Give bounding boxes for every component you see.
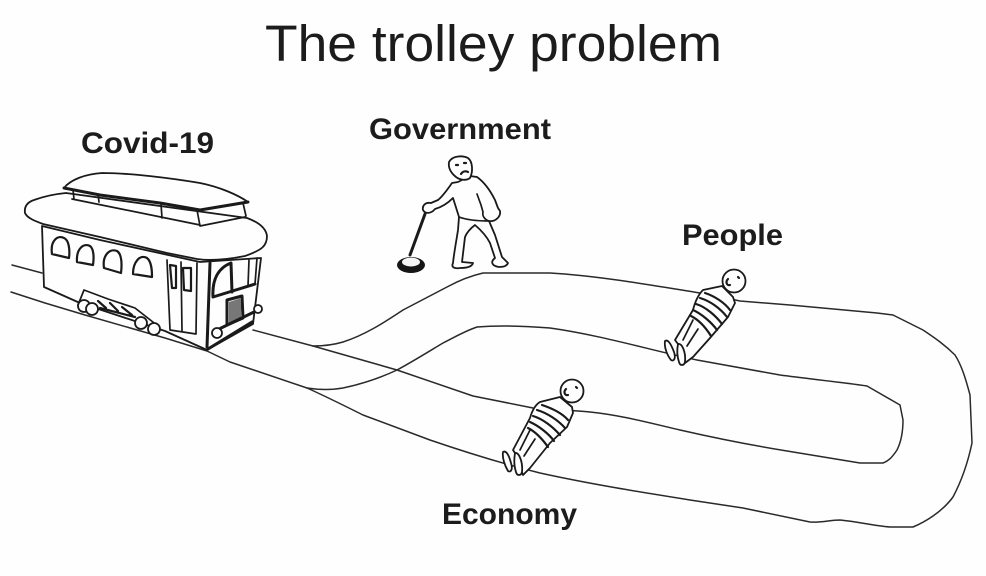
tram upper roof — [64, 173, 248, 210]
feet — [665, 341, 685, 365]
head — [449, 156, 472, 180]
tram wheels — [78, 290, 158, 326]
label: Covid-19: Covid-19 — [81, 127, 214, 160]
tram front windows — [213, 263, 255, 297]
tram lower roof — [25, 193, 267, 260]
label: Government: Government — [369, 113, 551, 146]
body — [423, 176, 508, 268]
stripes — [691, 293, 730, 336]
stripes — [528, 405, 568, 447]
body — [675, 286, 735, 363]
body — [513, 397, 573, 475]
trolley: Covid-19 tram car — [25, 173, 267, 350]
lever — [410, 214, 425, 255]
title: The trolley problem — [265, 15, 722, 72]
figure: person tied to lower track — [503, 380, 584, 475]
head — [722, 270, 746, 292]
head — [560, 380, 584, 402]
tram front panel — [227, 296, 243, 325]
tram door — [167, 260, 197, 334]
figure: person tied to upper track — [665, 270, 746, 365]
tram body — [42, 226, 261, 350]
figure: government at lever — [397, 156, 508, 273]
feet — [503, 452, 522, 475]
tram bumper — [208, 312, 254, 349]
label: People: People — [682, 219, 783, 252]
track: rails — [11, 265, 972, 527]
tram arched windows — [52, 237, 152, 277]
label: Economy: Economy — [442, 498, 577, 531]
